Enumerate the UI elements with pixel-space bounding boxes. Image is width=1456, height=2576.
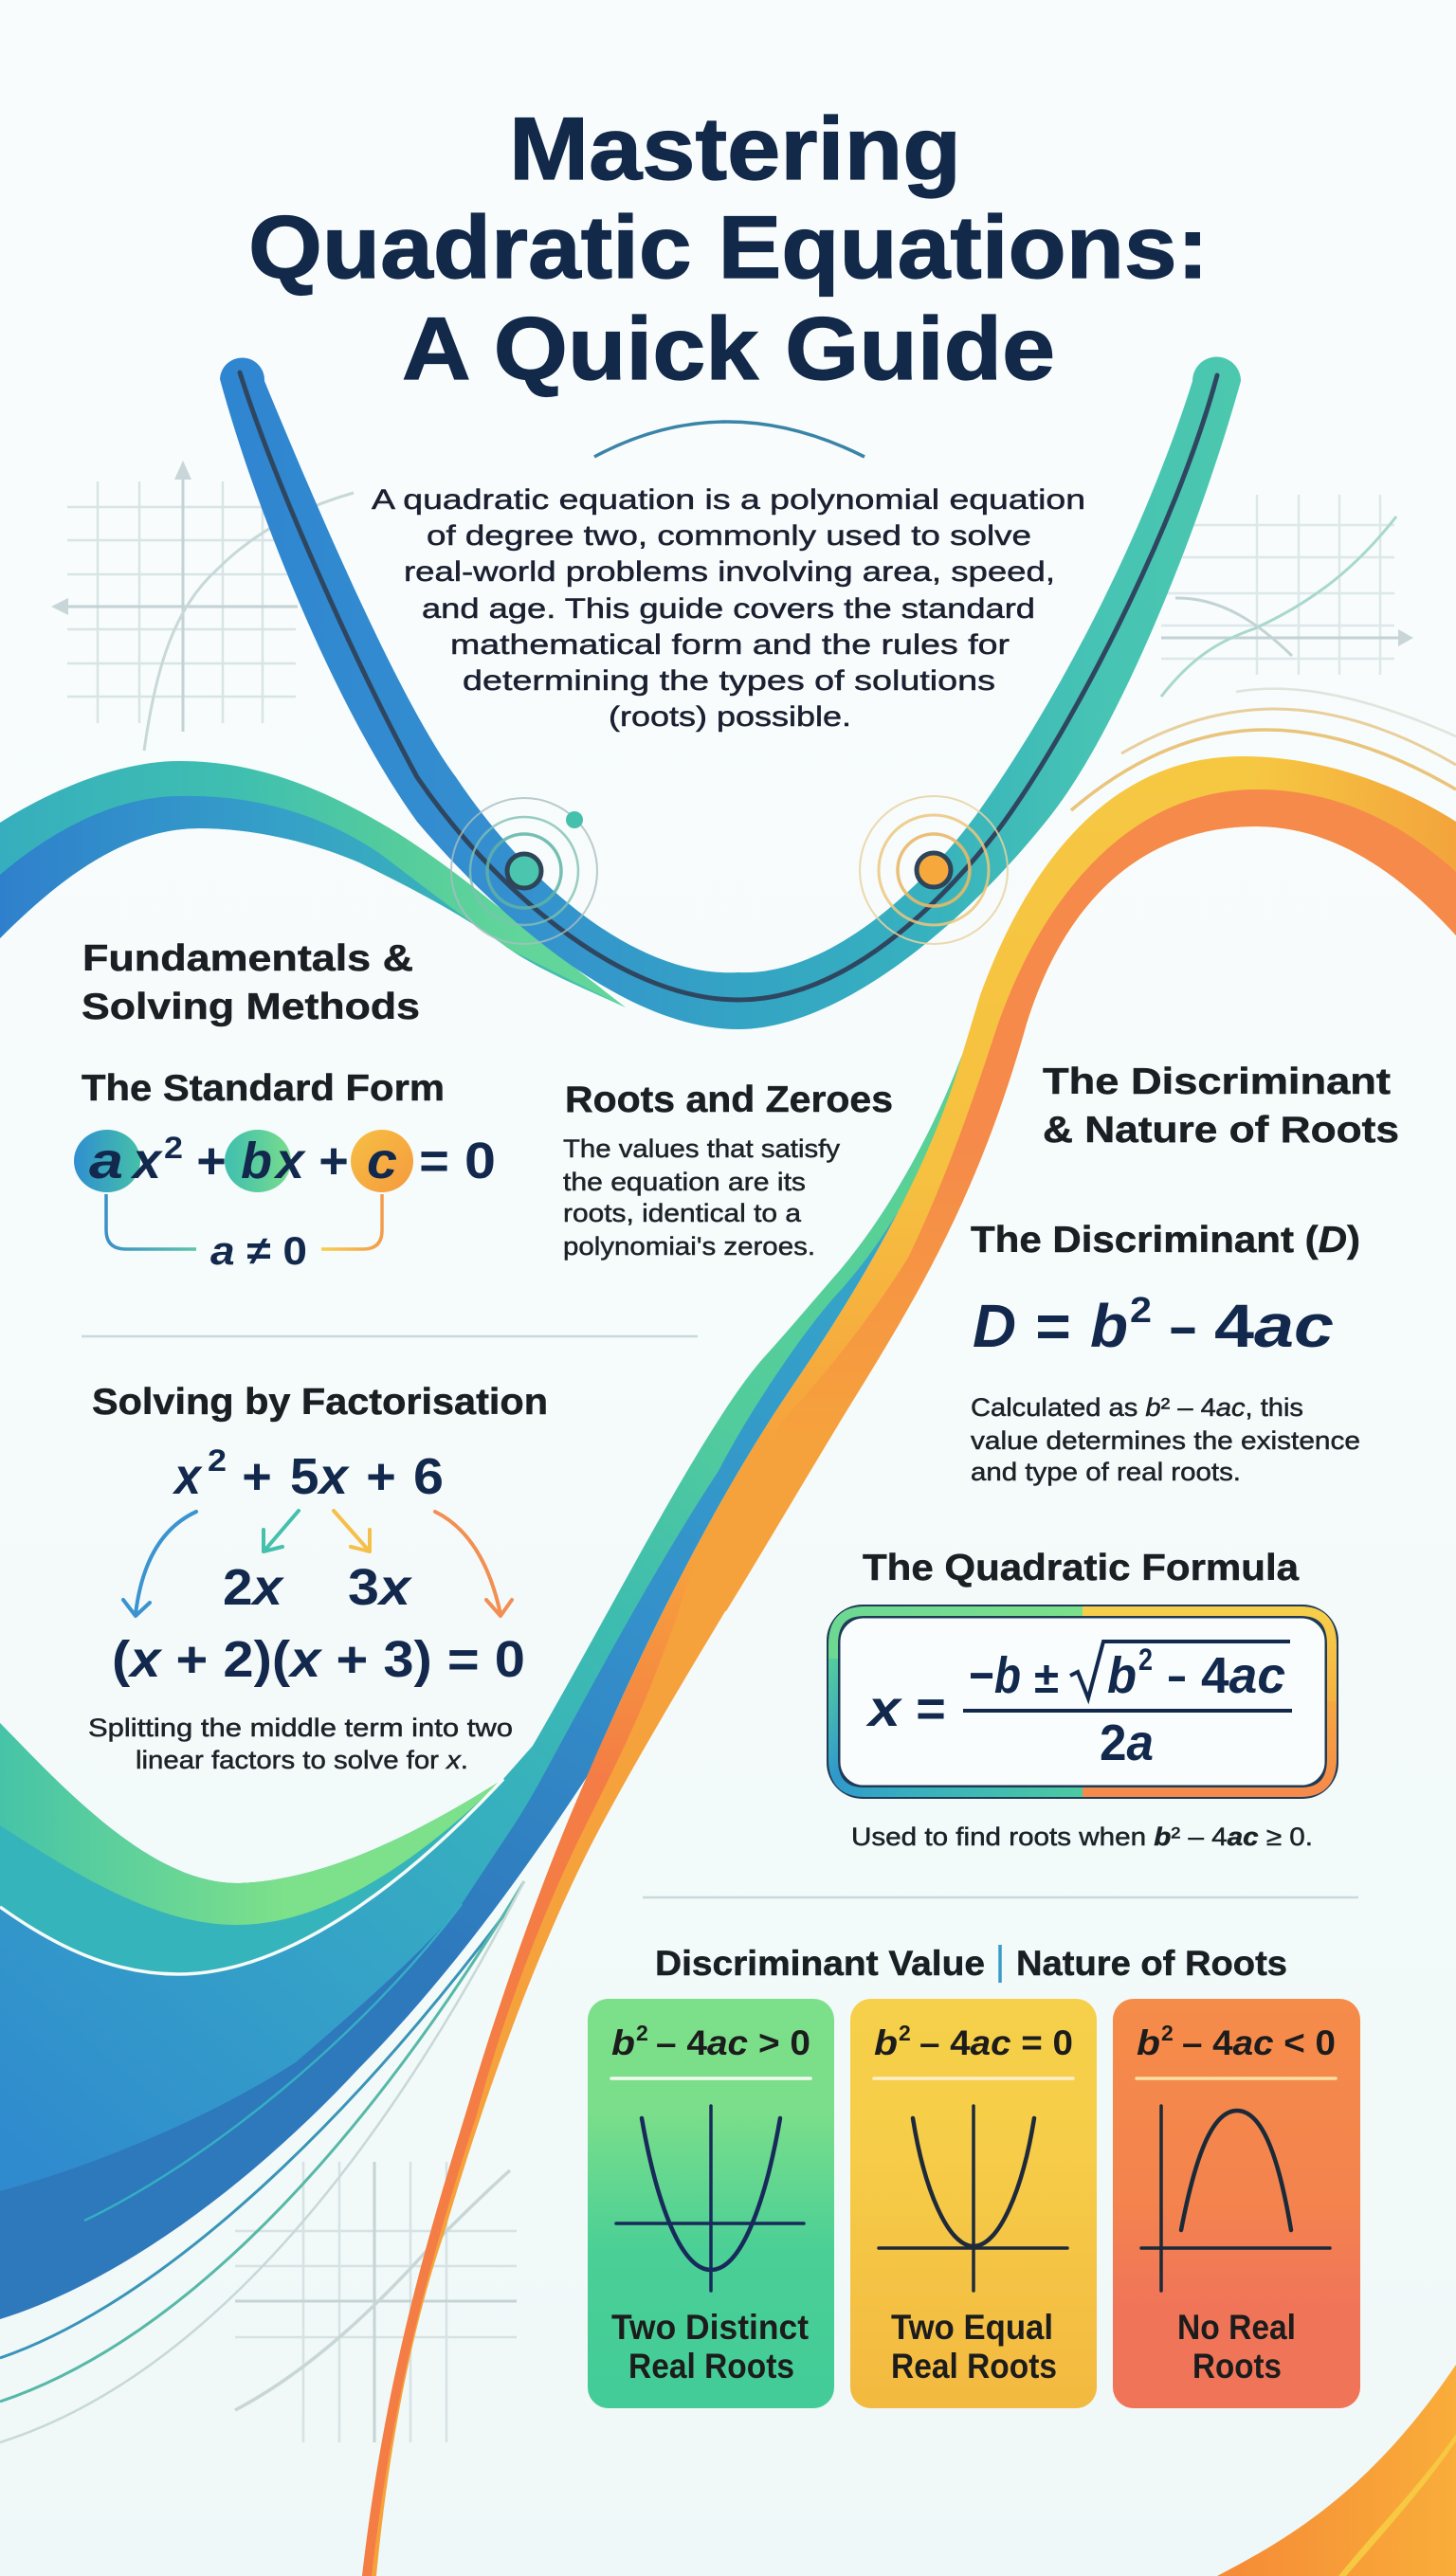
card: positive discriminant: – 4ac > 0 [656,2023,810,2062]
card: positive discriminant [588,1999,834,2408]
equation: standard form [74,1130,496,1192]
text: roots and zeroes description [563,1134,841,1261]
equation: standard form: c [367,1133,397,1189]
intro paragraph [372,484,1085,733]
graph: upper-right grid [1161,495,1413,697]
heading: discriminant value and nature of roots: Discriminant Value [655,1944,985,1983]
heading: roots and zeroes: Roots and Zeroes [565,1079,893,1120]
intro paragraph: mathematical form and the rules for [450,629,1010,661]
chart: parabola touching the axis [879,2106,1067,2291]
heading: the discriminant D: The Discriminant ( D) [971,1220,1360,1261]
terms: 2x and 3x [223,1559,412,1616]
text: roots and zeroes description: The values that satisfy [563,1134,841,1163]
equation: standard form: = [419,1133,449,1189]
equation: x squared plus 5x plus 6: 6 [413,1448,444,1505]
card: zero discriminant [850,1999,1097,2408]
equation: discriminant [973,1291,1334,1360]
card: positive discriminant: 2 [636,2021,648,2045]
arrow: yellow split [334,1511,370,1551]
heading: discriminant value and nature of roots: Nature of Roots [1016,1944,1287,1983]
lines: thin sweep under the ribbons [0,1881,524,2442]
arrow: orange split right [435,1512,512,1616]
text: roots and zeroes description: roots, identical to a [563,1199,802,1227]
card: negative discriminant: – 4ac < 0 [1182,2023,1336,2062]
intro paragraph: and age. This guide covers the standard [422,593,1035,625]
card: zero discriminant: b [874,2023,898,2062]
equation: standard form: b [241,1133,272,1189]
heading: fundamentals [82,938,420,1027]
equation: discriminant: D [973,1292,1016,1360]
equation: standard form: x [130,1133,163,1189]
intro paragraph: A quadratic equation is a polynomial equation [372,484,1085,516]
ribbon: upper-left wave [0,761,626,1007]
equation: x squared plus 5x plus 6: + [366,1448,396,1505]
equation: quadratic formula [865,1642,1292,1771]
text: discriminant description [971,1393,1360,1486]
card: negative discriminant: b [1137,2023,1160,2062]
text: discriminant description: and type of real roots. [971,1458,1241,1486]
title [248,99,1209,398]
text: factorisation caption: linear factors to solve for x. [136,1746,468,1774]
card: positive discriminant: b [611,2023,635,2062]
equation: discriminant: – [1170,1292,1196,1360]
equation: x squared plus 5x plus 6: 2 [208,1443,227,1478]
text: factorisation caption [88,1714,513,1774]
parabola: main curve [220,357,1241,1029]
chart: parabola with no real roots [1141,2106,1330,2291]
equation: x squared plus 5x plus 6: + [242,1448,272,1505]
heading: discriminant value and nature of roots [655,1944,1287,1983]
ribbons: lower-left sweep rising to the right [0,1055,962,2319]
text: factorisation caption: Splitting the middle term into two [88,1714,513,1742]
heading: the discriminant and nature of roots: The Discriminant [1043,1061,1391,1102]
heading: solving by factorisation: Solving by Factorisation [92,1382,548,1423]
equation: discriminant: b [1090,1292,1128,1360]
text: discriminant description: value determines the existence [971,1426,1360,1455]
card: negative discriminant: 2 [1161,2021,1174,2045]
equation: quadratic formula: x [865,1680,902,1737]
terms: 2x and 3x: 3x [348,1559,412,1616]
equation: standard form: x [273,1133,306,1189]
title: Quadratic Equations: [248,197,1209,297]
text: roots and zeroes description: the equation are its [563,1168,806,1196]
heading: the quadratic formula: The Quadratic Formula [863,1548,1299,1588]
title: Mastering [509,99,961,198]
equation: factored form: (x + 2)(x + 3) = 0 [112,1631,525,1688]
equation: x squared plus 5x plus 6: 5x [290,1448,350,1505]
equation: discriminant: 2 [1130,1291,1152,1331]
card: zero discriminant: Real Roots [891,2347,1057,2386]
chart: parabola with two roots [616,2106,804,2291]
equation: quadratic formula: 2 [1138,1642,1153,1677]
equation: quadratic formula: b [1107,1647,1137,1704]
note: a not equal zero with connectors [106,1194,382,1273]
equation: x squared plus 5x plus 6 [172,1443,444,1505]
heading: fundamentals: Fundamentals & [82,938,413,979]
equation: x squared plus 5x plus 6: x [172,1448,203,1505]
card: positive discriminant: Real Roots [628,2347,794,2386]
arcs: decorative sweep above the orange ribbon [1071,689,1456,810]
heading: the standard form: The Standard Form [82,1068,445,1109]
equation: quadratic formula: 4ac [1201,1647,1285,1704]
card: zero discriminant: – 4ac = 0 [919,2023,1073,2062]
equation: standard form: + [318,1133,349,1189]
intro paragraph: real-world problems involving area, speed, [404,556,1055,588]
intro paragraph: (roots) possible. [609,701,851,733]
equation: quadratic formula: – [1168,1647,1186,1704]
equation: quadratic formula: 2a [1100,1714,1154,1771]
panel: quadratic formula box [827,1605,1338,1799]
card: negative discriminant: No Real [1177,2308,1296,2347]
heading: the discriminant and nature of roots: & Nature of Roots [1043,1110,1399,1151]
equation: quadratic formula: −b [969,1647,1021,1704]
equation: discriminant: = [1035,1292,1071,1360]
title: A Quick Guide [402,299,1055,398]
decorative arc under title [594,422,864,457]
text: discriminant description: Calculated as b² – 4ac, this [971,1393,1303,1422]
equation: quadratic formula: = [916,1680,946,1737]
arrow: teal split [264,1511,299,1551]
terms: 2x and 3x: 2x [223,1559,284,1616]
equation: standard form: a [89,1133,123,1189]
equation: quadratic formula: ± [1034,1653,1059,1702]
graph: lower-left grid [235,2162,517,2442]
card: zero discriminant: 2 [899,2021,911,2045]
shape: bottom-right corner wave [1217,2365,1456,2576]
card: zero discriminant: Two Equal [891,2308,1053,2347]
note: a not equal zero with connectors: a ≠ 0 [210,1228,307,1273]
icon: right root marker with rings [860,796,1008,944]
equation: standard form: + [196,1133,227,1189]
arrow: blue split left [123,1512,196,1616]
intro paragraph: of degree two, commonly used to solve [427,520,1031,552]
icon: left root marker with rings [451,798,597,944]
text: roots and zeroes description: polynomiai's zeroes. [563,1232,815,1261]
equation: standard form: 2 [164,1131,183,1165]
card: negative discriminant [1113,1999,1360,2408]
ribbon: yellow and orange arc [362,756,1456,2576]
heading: the discriminant and nature of roots [1043,1061,1399,1151]
intro paragraph: determining the types of solutions [463,665,995,697]
graph: upper-left grid [51,461,354,751]
equation: discriminant: 4ac [1214,1292,1334,1360]
text: quadratic formula caption: Used to find roots when b² – 4ac ≥ 0. [851,1823,1313,1851]
card: negative discriminant: Roots [1192,2347,1282,2386]
card: positive discriminant: Two Distinct [611,2308,809,2347]
heading: fundamentals: Solving Methods [82,987,420,1027]
equation: standard form: 0 [464,1133,496,1189]
